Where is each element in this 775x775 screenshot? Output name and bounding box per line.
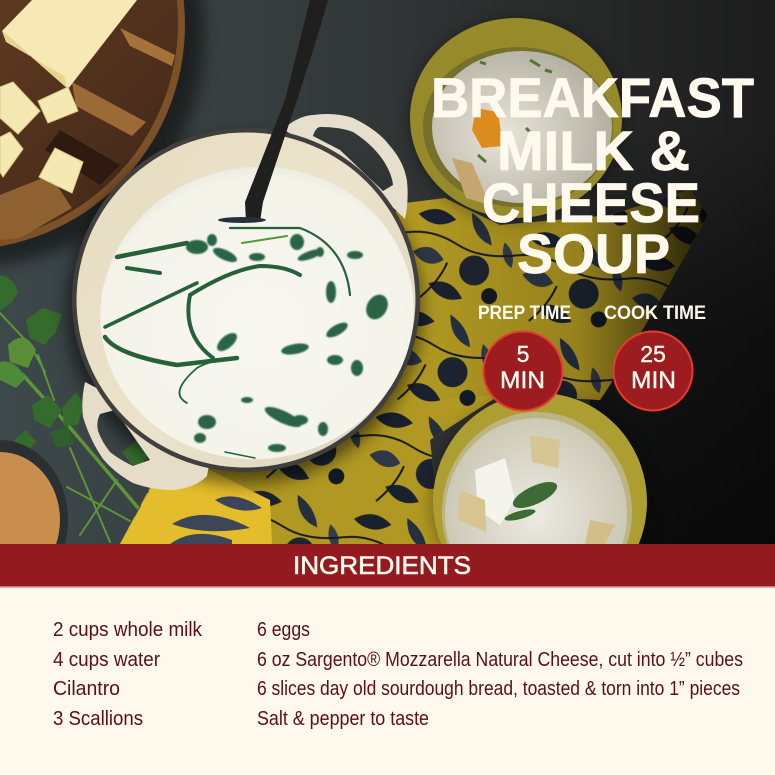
soup pot xyxy=(72,0,420,490)
title line: MILK &: MILK & xyxy=(497,119,690,182)
cheese cubes xyxy=(0,82,83,193)
cook time badge xyxy=(614,332,692,410)
prep time badge: 5 xyxy=(517,341,529,367)
ingredient list: right column: Salt & pepper to taste xyxy=(257,708,429,730)
lower soup bowl xyxy=(424,392,647,544)
pot handles xyxy=(82,114,408,490)
ingredient list: left column: 2 cups whole milk xyxy=(53,619,203,641)
cook time label: COOK TIME xyxy=(604,303,706,324)
title line: CHEESE: CHEESE xyxy=(482,171,700,234)
ingredient list: left column xyxy=(53,619,203,730)
cook time badge: MIN xyxy=(631,367,676,394)
recipe title xyxy=(431,66,754,285)
cheese block xyxy=(2,0,137,89)
prep time badge: MIN xyxy=(500,367,545,394)
cutting board with cheese xyxy=(0,0,185,250)
ingredient list: left column: 3 Scallions xyxy=(53,708,143,730)
board shadow on the table xyxy=(0,0,204,267)
title line: SOUP: SOUP xyxy=(517,222,670,285)
yellow floral napkin xyxy=(120,190,708,544)
cilantro bunch xyxy=(0,275,148,543)
ingredient list: right column: 6 eggs xyxy=(257,619,310,641)
banner heading: INGREDIENTS xyxy=(293,552,471,580)
prep time label: PREP TIME xyxy=(478,303,571,324)
egg yolk xyxy=(472,108,503,148)
upper soup bowl xyxy=(410,18,622,220)
ladle xyxy=(245,0,328,222)
milk soup xyxy=(100,166,414,460)
cook time badge: 25 xyxy=(640,341,666,367)
ingredients panel background xyxy=(0,587,775,775)
pot shadow xyxy=(66,136,422,484)
ingredient list: right column xyxy=(257,619,743,730)
ingredient list: left column: Cilantro xyxy=(53,678,120,700)
sauce bowl xyxy=(0,440,68,544)
napkin leaves xyxy=(170,496,262,544)
scallions and cilantro in soup xyxy=(105,228,350,458)
photo: overhead table scene xyxy=(0,0,775,544)
prep time badge xyxy=(484,332,562,410)
slate table background xyxy=(0,0,775,544)
ingredients banner xyxy=(0,544,775,588)
title line: BREAKFAST: BREAKFAST xyxy=(431,66,754,129)
shadow on the right of the table xyxy=(590,236,775,544)
chopped herbs xyxy=(504,482,558,521)
ingredient list: left column: 4 cups water xyxy=(53,649,160,671)
